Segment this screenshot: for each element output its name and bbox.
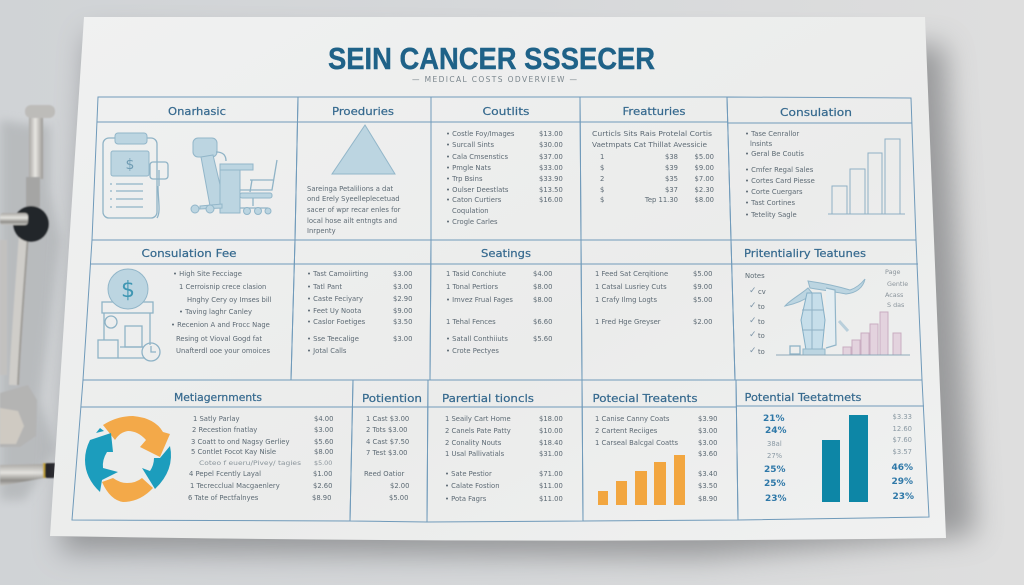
cost list: 1 Crafy Ilmg Logts: [595, 296, 657, 304]
list: • Cortes Card Piesse: [745, 177, 815, 185]
list: • Geral Be Coutis: [745, 150, 804, 158]
cost list: $18.40: [539, 439, 563, 447]
illustration: medical device: [785, 279, 865, 355]
icon: triangle: [332, 125, 395, 174]
cost list: $9.00: [693, 283, 712, 291]
percent list: 25%: [764, 479, 786, 489]
cost list: 2 Tots $3.00: [366, 426, 407, 434]
notes checklist: [745, 272, 766, 356]
notes checklist: to: [758, 303, 765, 311]
cost list: $5.00: [693, 296, 712, 304]
heading: Potential Teetatmets: [744, 392, 862, 404]
cost list: $3.50: [393, 318, 412, 326]
panel: Consulation: [727, 97, 916, 240]
heading: Freatturies: [622, 106, 686, 118]
text block: ond Erely Syeelleplecetuad: [307, 195, 400, 203]
cost list: Coqulation: [452, 207, 489, 215]
cost table: Tep 11.30: [644, 196, 678, 204]
cost list: $8.00: [533, 283, 552, 291]
cost list: 4 Pepel Fcently Layal: [189, 470, 261, 478]
cost list: 2 Recestion fnatlay: [192, 426, 257, 434]
text block: Inrpenty: [307, 227, 336, 235]
panel: fee list: [291, 240, 431, 380]
cost list: $10.00: [539, 427, 563, 435]
cost list: • Pota Fagrs: [445, 495, 487, 503]
cost list: $5.00: [314, 459, 332, 467]
cost list: 2 Cartent Reciiges: [595, 427, 658, 435]
text block: Sareinga Petalilions a dat: [307, 185, 394, 193]
side notes: [885, 268, 908, 309]
cost list: $3.00: [393, 270, 412, 278]
heading: Proeduries: [332, 106, 394, 118]
text block: local hose ailt entngts and: [307, 217, 397, 225]
values list: $3.33: [893, 413, 912, 421]
cost list: $8.90: [312, 494, 331, 502]
panel: Freatturies: [580, 97, 731, 240]
notes checklist: to: [758, 348, 765, 356]
heading: Pritentialiry Teatunes: [744, 248, 866, 260]
list: • Tase Cenrallor: [745, 130, 799, 138]
title: SEIN CANCER SSSECER: [328, 41, 655, 76]
heading: Onarhasic: [168, 106, 226, 118]
notes checklist: ✓: [749, 330, 757, 340]
list: lnsints: [750, 140, 773, 148]
panel: Potiention: [350, 380, 428, 522]
bar chart: orange: [598, 455, 685, 505]
cost list: $8.90: [698, 495, 717, 503]
cost list: $3.00: [698, 439, 717, 447]
cost list: [307, 270, 412, 355]
cost list: $16.00: [539, 196, 563, 204]
cost list: 1 Cast $3.00: [366, 415, 409, 423]
panel: Onarhasic: [92, 97, 298, 240]
cost list: 2 Conality Nouts: [445, 439, 502, 447]
cost list: • Satall Conthiiuts: [446, 335, 508, 343]
cost list: $3.60: [698, 450, 717, 458]
cost table: Vaetmpats Cat Thillat Avessicie: [592, 141, 707, 149]
cost list: • Jotal Calls: [307, 347, 347, 355]
cost list: 1 Tecrecclual Macgaenlery: [190, 482, 280, 490]
cost list: $3.50: [698, 482, 717, 490]
text block: [171, 270, 272, 355]
notes checklist: ✓: [749, 346, 757, 356]
cost list: • Imvez Frual Fages: [446, 296, 513, 304]
heading: Consulation: [780, 107, 852, 119]
cost list: Coteo f eueru/Pivey/ tagies: [199, 459, 302, 467]
cost list: 1 Tehal Fences: [446, 318, 496, 326]
notes checklist: to: [758, 318, 765, 326]
panel: Pritentialiry Teatunes: [731, 240, 922, 380]
cost list: $3.00: [393, 283, 412, 291]
cost list: • Sse Teecalige: [307, 335, 359, 343]
text block: • Recenion A and Frocc Nage: [171, 321, 270, 329]
text block: Unafterdl ooe your omoices: [176, 347, 270, 355]
cost list: $3.90: [698, 415, 717, 423]
cost list: [595, 415, 717, 503]
notes checklist: ✓: [749, 316, 757, 326]
cost list: 7 Test $3.00: [366, 449, 408, 457]
cost list: $18.00: [539, 415, 563, 423]
cost table: $7.00: [695, 175, 714, 183]
heading: Metiagernments: [174, 392, 262, 404]
icon: clipboard with dollar: $: [126, 157, 134, 173]
panel: Parertial tioncls: [427, 380, 583, 522]
cost list: $5.60: [533, 335, 552, 343]
medical instrument on the left: [0, 105, 60, 500]
list: [745, 130, 815, 219]
cost list: [595, 270, 712, 326]
cost table: $2.30: [695, 186, 714, 194]
cost table: Curticls Sits Rais Protelal Cortis: [592, 130, 713, 138]
panel: Proeduries: [295, 97, 431, 240]
table of panels: [72, 97, 929, 522]
heading: Consulation Fee: [142, 248, 236, 260]
bar chart: teal: [822, 415, 868, 502]
cost list: $5.60: [314, 438, 333, 446]
title block: [328, 41, 655, 84]
cost list: $8.00: [533, 296, 552, 304]
cost list: $37.00: [539, 153, 563, 161]
heading: Potecial Treatents: [592, 393, 698, 405]
panel: Consulation Fee: [83, 240, 295, 380]
paper sheet: [50, 17, 946, 541]
cost list: • Trp Bsins: [446, 175, 483, 183]
cost table: $: [600, 186, 604, 194]
cost list: • Costle Foy/Images: [446, 130, 515, 138]
cost list: $4.00: [314, 415, 333, 423]
cost list: • Sate Pestior: [445, 470, 492, 478]
cost table: $8.00: [695, 196, 714, 204]
cost table: $9.00: [695, 164, 714, 172]
cost list: • Cala Cmsenstics: [446, 153, 509, 161]
cost table: $5.00: [695, 153, 714, 161]
cost list: 1 Fred Hge Greyser: [595, 318, 661, 326]
chart: pink bars: [776, 312, 910, 355]
cost list: 1 Catsal Lusriey Cuts: [595, 283, 667, 291]
notes checklist: to: [758, 332, 765, 340]
cost table: [592, 130, 714, 204]
cost list: [188, 415, 333, 502]
cost list: $3.40: [698, 470, 717, 478]
icon: clipboard with dollar: [103, 133, 168, 218]
cost table: $35: [665, 175, 678, 183]
values list: 29%: [891, 477, 913, 487]
heading: Seatings: [481, 248, 531, 260]
text block: 1 Cerroisnip crece clasion: [179, 283, 266, 291]
cost list: $9.00: [393, 307, 412, 315]
cost list: 3 Coatt to ond Nagsy Gerliey: [191, 438, 289, 446]
cost list: $3.00: [314, 426, 333, 434]
cost list: $30.00: [539, 141, 563, 149]
cost list: • Tast Camoiirting: [307, 270, 368, 278]
icon: cycle arrows: [85, 416, 171, 502]
cost list: $1.00: [313, 470, 332, 478]
paper shadow: [60, 35, 975, 558]
cost list: • Crote Pectyes: [446, 347, 499, 355]
icon: coin with desk and clock: $: [121, 278, 135, 303]
cost list: $11.00: [539, 495, 563, 503]
cost list: • Feet Uy Noota: [307, 307, 361, 315]
heading: Parertial tioncls: [442, 393, 534, 405]
cost list: • Caton Curtiers: [446, 196, 502, 204]
percent list: 23%: [765, 494, 787, 504]
cost list: $6.60: [533, 318, 552, 326]
list: • Cmfer Regal Sales: [745, 166, 814, 174]
cost list: 1 Usal Pallivatials: [445, 450, 505, 458]
panel: Potecial Treatents: [582, 380, 738, 521]
cost list: [446, 130, 563, 226]
cost list: $13.00: [539, 130, 563, 138]
cost list: • Calate Fostion: [445, 482, 500, 490]
percent list: 21%: [763, 414, 785, 424]
cost list: $13.50: [539, 186, 563, 194]
cost list: $5.00: [389, 494, 408, 502]
cost list: • Pmgle Nats: [446, 164, 491, 172]
panel: Seatings: [430, 240, 582, 380]
cost list: 2 Canels Pate Patty: [445, 427, 511, 435]
cost list: • Caste Feciyary: [307, 295, 363, 303]
cost list: $2.60: [313, 482, 332, 490]
percent list: [763, 414, 787, 504]
cost list: $11.00: [539, 482, 563, 490]
icon: coin with desk and clock: [98, 269, 160, 361]
cost list: $71.00: [539, 470, 563, 478]
percent list: 24%: [765, 426, 787, 436]
text block: Resing ot Vioval Gogd fat: [176, 335, 262, 343]
text block: • High Site Fecciage: [173, 270, 242, 278]
cost list: 1 Carseal Balcgal Coatts: [595, 439, 679, 447]
notes checklist: cv: [758, 288, 766, 296]
cost list: Reed Oatior: [364, 470, 404, 478]
cost list: 1 Canise Canny Coats: [595, 415, 670, 423]
cost list: • Crogle Carles: [446, 218, 498, 226]
cost list: 1 Tasid Conchiute: [446, 270, 506, 278]
text block: [307, 185, 401, 235]
cost list: 5 Contlet Focot Kay Nisle: [191, 448, 276, 456]
cost list: • Caslor Foetiges: [307, 318, 366, 326]
cost table: $: [600, 196, 604, 204]
cost table: $37: [665, 186, 678, 194]
text block: sacer of wpr recar enles for: [307, 206, 401, 214]
cost list: $3.00: [393, 335, 412, 343]
notes checklist: Notes: [745, 272, 765, 280]
side notes: S das: [887, 301, 905, 309]
panel: Metiagernments: [72, 380, 353, 521]
cost table: 1: [600, 153, 604, 161]
notes checklist: ✓: [749, 286, 757, 296]
panel: Coutlits: [431, 97, 581, 240]
cost list: $31.00: [539, 450, 563, 458]
heading: Potiention: [362, 393, 422, 405]
cost list: 1 Satly Parlay: [193, 415, 240, 423]
cost table: $39: [665, 164, 678, 172]
values list: $3.57: [893, 448, 912, 456]
percent list: 38al: [767, 440, 782, 448]
cost table: 2: [600, 175, 604, 183]
cost list: $8.00: [314, 448, 333, 456]
text block: • Taving laghr Canley: [179, 308, 252, 316]
cost list: $5.00: [693, 270, 712, 278]
cost list: 4 Cast $7.50: [366, 438, 409, 446]
percent list: 27%: [767, 452, 783, 460]
values list: 12.60: [893, 425, 912, 433]
cost list: $2.90: [393, 295, 412, 303]
cost list: $33.00: [539, 164, 563, 172]
values list: 46%: [891, 463, 913, 473]
bar chart: [828, 139, 905, 214]
side notes: Page: [885, 268, 901, 276]
side notes: Acass: [885, 291, 904, 299]
cost list: 1 Seaily Cart Home: [445, 415, 511, 423]
side notes: Gentle: [887, 280, 908, 288]
panel: seating costs: [581, 240, 735, 380]
subtitle: — MEDICAL COSTS ODVERVIEW —: [412, 75, 578, 84]
list: • Corte Cuergars: [745, 188, 803, 196]
values list: 23%: [892, 492, 914, 502]
cost list: $3.00: [698, 427, 717, 435]
percent list: 25%: [764, 465, 786, 475]
cost list: [445, 415, 563, 503]
heading: Coutlits: [482, 106, 530, 118]
cost list: • Tatl Pant: [307, 283, 342, 291]
icon: treatment chair and desk: [191, 138, 277, 214]
panel: Potential Teetatmets: [736, 380, 929, 520]
cost list: $33.90: [539, 175, 563, 183]
cost list: • Oulser Deestlats: [446, 186, 509, 194]
text block: Hnghy Cery oy Imses bill: [187, 296, 272, 304]
cost table: $38: [665, 153, 678, 161]
list: • Tetelity Sagle: [745, 211, 797, 219]
cost list: $2.00: [693, 318, 712, 326]
cost list: 1 Tonal Pertiors: [446, 283, 499, 291]
cost list: • Surcall Sints: [446, 141, 494, 149]
cost list: 1 Feed Sat Cerqitione: [595, 270, 668, 278]
cost list: 6 Tate of Pectfalnyes: [188, 494, 259, 502]
notes checklist: ✓: [749, 301, 757, 311]
values list: [891, 413, 914, 502]
values list: $7.60: [893, 436, 912, 444]
cost list: $2.00: [390, 482, 409, 490]
cost list: [364, 415, 409, 502]
list: • Tast Cortines: [745, 199, 795, 207]
cost list: $4.00: [533, 270, 552, 278]
cost list: [446, 270, 552, 355]
cost table: $: [600, 164, 604, 172]
